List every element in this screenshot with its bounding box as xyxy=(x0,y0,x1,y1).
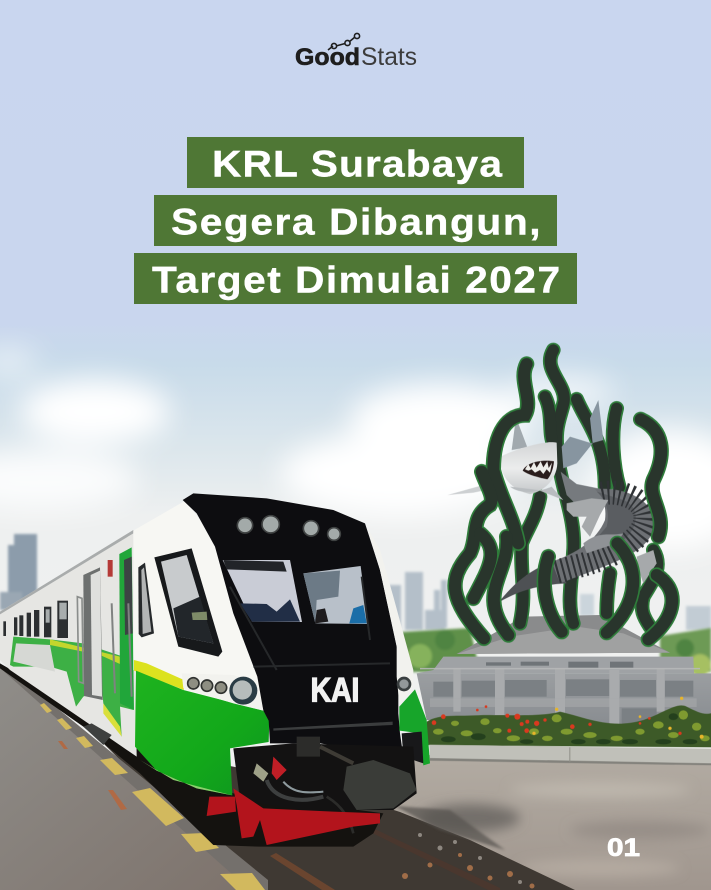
logo chart line icon xyxy=(328,33,360,50)
towers left xyxy=(0,534,37,610)
shark tail xyxy=(562,400,603,468)
crocodile head xyxy=(561,472,610,508)
panels xyxy=(433,662,693,725)
front lower band xyxy=(273,722,393,731)
seaweed fronds front xyxy=(455,364,672,639)
KAI logo text: KAI xyxy=(311,672,359,710)
side door window xyxy=(138,563,154,637)
cab green nose xyxy=(135,671,269,795)
shark mouth xyxy=(523,461,554,479)
left headlights xyxy=(182,673,263,711)
rails xyxy=(358,823,500,890)
platform yellow markings xyxy=(40,703,265,890)
towers right of train xyxy=(389,572,711,630)
carriage door xyxy=(83,567,103,700)
trees xyxy=(402,628,711,676)
logo wordmark: Good xyxy=(295,44,360,71)
cab side window xyxy=(154,548,222,657)
monument Suro dan Boyo xyxy=(417,350,711,765)
pavement texture xyxy=(420,782,710,877)
cab right white side xyxy=(367,527,413,704)
cab right green side xyxy=(399,689,430,765)
carriage windows xyxy=(3,601,68,638)
title line 1: KRL Surabaya xyxy=(212,144,502,185)
crocodile xyxy=(498,472,657,603)
crocodile ribs xyxy=(557,492,646,572)
shadow on pavement xyxy=(395,806,505,850)
shark pectoral fin xyxy=(447,483,502,495)
cab yellow stripe xyxy=(134,660,184,690)
cab black front xyxy=(183,493,403,757)
crocodile body fill xyxy=(552,489,654,583)
shark body xyxy=(500,442,557,494)
flower bed xyxy=(427,697,711,747)
wipers xyxy=(230,577,390,670)
seaweed fronds back xyxy=(520,350,657,627)
logo GoodStats: Stats xyxy=(361,43,417,71)
roof lamps xyxy=(237,516,340,540)
shark xyxy=(447,400,603,500)
title line 2: Segera Dibangun, xyxy=(171,202,541,243)
railway platform xyxy=(0,668,268,890)
clouds xyxy=(0,348,711,550)
train undercarriage shadow xyxy=(0,663,383,847)
crocodile legs xyxy=(567,498,608,537)
carriage side xyxy=(0,530,137,757)
crocodile tail xyxy=(498,562,567,603)
title line 3: Target Dimulai 2027 xyxy=(152,260,560,301)
shark dorsal fin xyxy=(512,417,527,450)
page number: 01 xyxy=(607,834,640,862)
carriage green livery xyxy=(10,637,133,737)
right headlight xyxy=(397,677,411,691)
title line 1 xyxy=(187,137,524,188)
red bumper xyxy=(207,788,380,845)
pavement ground xyxy=(380,755,711,890)
gravel and tracks xyxy=(100,740,575,890)
windshield xyxy=(223,560,368,624)
city skyline xyxy=(0,534,711,630)
logo GoodStats xyxy=(295,33,417,71)
green door xyxy=(119,547,134,710)
cab white xyxy=(133,501,263,711)
coupler and hoses xyxy=(233,737,417,833)
monument base wall xyxy=(417,615,711,730)
train xyxy=(0,493,430,847)
curb xyxy=(429,745,711,765)
